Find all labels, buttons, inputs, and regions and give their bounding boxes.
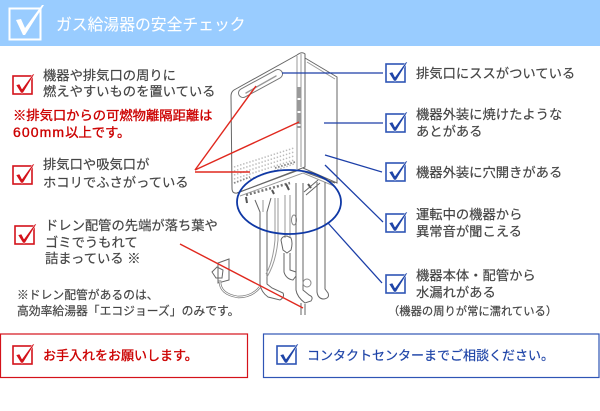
icon: blue check xyxy=(386,62,408,82)
text: burn marks: 機器外装に焼けたような xyxy=(416,107,562,122)
red clearance note: 以上です。 xyxy=(65,125,130,140)
handle slot xyxy=(243,74,278,93)
side vents xyxy=(298,87,300,128)
item: drain blocked xyxy=(15,218,218,266)
header band xyxy=(0,0,600,46)
item: vents clogged xyxy=(13,157,189,190)
power outlet and cord xyxy=(212,259,260,297)
red pointer lines xyxy=(180,86,303,308)
icon: blue check xyxy=(386,161,408,181)
text: combustibles: 燃えやすいものを置いている xyxy=(43,83,215,99)
item: abnormal noise xyxy=(386,207,522,239)
item: soot on vent xyxy=(386,62,575,82)
text: contact centre: コンタクトセンターまでご相談ください。 xyxy=(307,348,554,363)
icon: blue check xyxy=(386,212,408,232)
item: combustibles near unit xyxy=(13,68,215,99)
text: maintenance request: お手入れをお願いします。 xyxy=(43,348,198,363)
item: water leak xyxy=(386,268,557,318)
icon: red check xyxy=(13,344,34,364)
highlight ellipse around piping xyxy=(237,170,341,234)
icon: header checkbox xyxy=(10,5,44,40)
underside plate xyxy=(237,170,335,193)
text: water leak: 水漏れがある xyxy=(416,285,496,300)
text: water leak: 機器本体・配管から xyxy=(416,268,536,283)
blue action box xyxy=(264,334,599,378)
icon: blue check xyxy=(277,344,298,364)
item: burn marks xyxy=(386,107,562,139)
icon: blue check xyxy=(386,273,408,293)
text: leak note: （機器の周りが常に濡れている） xyxy=(388,304,557,318)
red action box xyxy=(0,334,248,378)
text: drain blocked: ドレン配管の先端が落ち葉や xyxy=(45,218,218,233)
text: vents clogged: ホコリでふさがっている xyxy=(43,175,189,190)
red clearance note: ※排気口からの可燃物離隔距離は xyxy=(13,108,212,123)
text: drain blocked: 詰まっている ※ xyxy=(45,251,141,266)
text: soot: 排気口にススがついている xyxy=(416,66,575,81)
text: vents clogged: 排気口や吸気口が xyxy=(43,157,149,172)
red clearance note: 600mm xyxy=(13,124,65,140)
icon: red check xyxy=(13,164,34,184)
text: burn marks: あとがある xyxy=(416,124,482,139)
pipes xyxy=(246,180,328,315)
drain footnote: 高効率給湯器「エコジョーズ」のみです。 xyxy=(17,304,239,318)
heater body xyxy=(231,53,337,196)
text: holes: 機器外装に穴開きがある xyxy=(416,165,562,180)
text: drain blocked: ゴミでうもれて xyxy=(45,234,138,250)
icon: red check xyxy=(15,224,36,244)
item: holes in casing xyxy=(386,161,562,181)
blue pointer lines xyxy=(282,73,383,283)
text: noise: 異常音が聞こえる xyxy=(416,224,522,239)
illustration: gas water heater xyxy=(212,53,337,315)
icon: blue check xyxy=(386,112,408,132)
vent dots xyxy=(234,148,294,179)
icon: red check xyxy=(13,74,34,94)
text: noise: 運転中の機器から xyxy=(416,207,522,222)
text: combustibles: 機器や排気口の周りに xyxy=(43,68,176,83)
drain footnote: ※ドレン配管があるのは、 xyxy=(17,288,159,302)
title: ガス給湯器の安全チェック xyxy=(56,16,246,34)
